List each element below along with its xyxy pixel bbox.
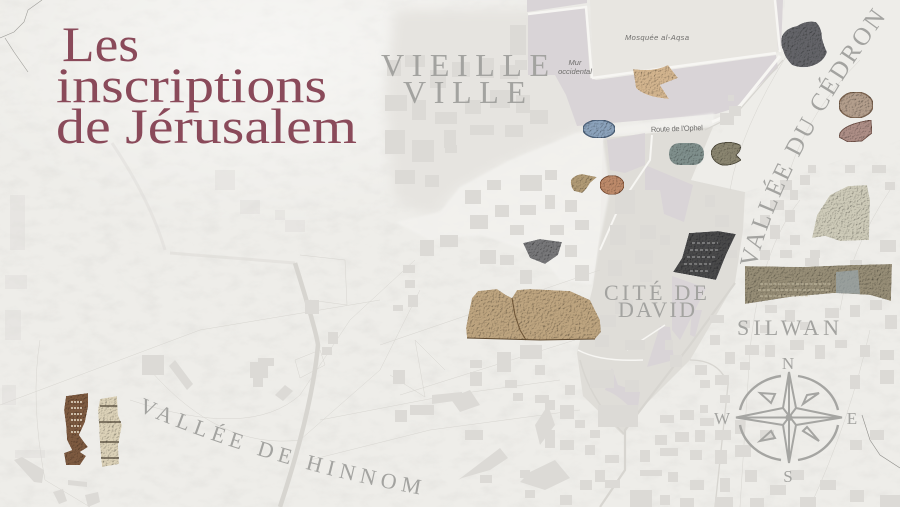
artefact: blue seal [583,120,615,138]
label: Mosquée al-Aqsa: Mosquée al-Aqsa [625,33,689,42]
compass rose [714,354,857,486]
artefact: broken tan seal [571,174,597,193]
label: Cité de David: CITÉ DE [604,280,707,305]
label: Vieille Ville: VIEILLE [381,47,549,83]
compass letter N: N [782,354,794,373]
label: Cité de David [604,280,707,322]
artefact: brown seal [839,92,873,118]
label: Vieille Ville [381,47,549,110]
label: Vallée de Hinnom: VALLÉE DE HINNOM [144,398,422,494]
label: Vieille Ville: VILLE [403,74,526,110]
artefact: green-grey seal [669,143,704,165]
compass letter E: E [847,409,857,428]
artefact: orange seal [600,176,624,194]
artefact: grey striped sherd [523,239,562,264]
artefact: olive seal [711,142,741,165]
artefact: silver scroll, brown [64,393,88,465]
artefact: silver scroll, pale [98,396,122,467]
label: Mur occidental: Mur [569,58,582,67]
compass letter W: W [714,409,731,428]
map: mauve archaeological areas [527,0,783,415]
compass letter S: S [783,467,793,486]
label: Silwan: SILWAN [737,315,839,340]
artefact: large tan tablet [466,289,601,340]
label: Cité de David: DAVID [618,297,695,322]
label: Mur occidental [558,58,592,76]
label: Vallée du Cédron: VALLÉE DU CÉDRON [740,8,884,264]
artefact: limestone ostracon [812,185,870,241]
title: inscriptions [56,57,327,113]
title: de Jérusalem [56,98,357,154]
title [56,16,357,154]
artefact: long inscribed stone [745,264,892,304]
artefact: curved tan sherd [633,65,678,99]
map: ground zones [385,0,900,435]
artefact: black inscribed tablet [673,231,736,280]
map: white roads and open areas [395,0,780,360]
label: Route de l'Ophel: Route de l'Ophel [651,123,703,134]
artefact: red-brown seal [839,120,872,142]
title: Les [62,16,139,72]
artefact: dark rock [781,22,827,67]
label: Mur occidental: occidental [558,67,592,76]
